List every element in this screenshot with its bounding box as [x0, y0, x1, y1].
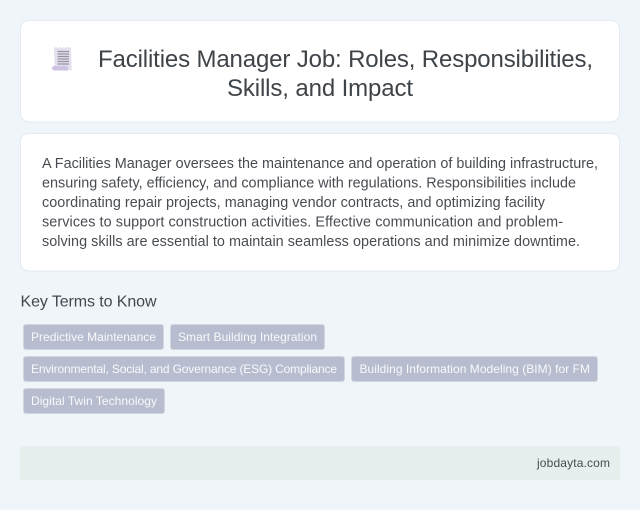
tag: smart building integration: Smart Building Integration — [178, 330, 317, 344]
tag: BIM for FM — [352, 356, 598, 382]
description text — [42, 156, 598, 250]
description text: services to support construction activities. Effective communication and problem- — [42, 214, 563, 230]
heading: key terms: Key Terms to Know — [20, 294, 157, 310]
title: Skills, and Impact — [227, 75, 413, 102]
tag: smart building integration — [170, 324, 324, 350]
tag: BIM for FM: Building Information Modeling (BIM) for FM — [360, 362, 590, 376]
footer bar — [20, 446, 620, 480]
icon: document scroll — [52, 47, 73, 70]
description text: ensuring safety, efficiency, and compliance with regulations. Responsibilities include — [42, 176, 576, 192]
panel: title card — [20, 20, 620, 122]
description text: coordinating repair projects, managing vendor contracts, and optimizing facility — [42, 195, 546, 211]
title: Facilities Manager Job: Roles, Responsibilities, — [98, 46, 593, 73]
tag: predictive maintenance — [24, 324, 164, 350]
description text: solving skills are essential to maintain seamless operations and minimize downtime. — [42, 234, 580, 250]
title — [98, 46, 593, 102]
description text: A Facilities Manager oversees the maintenance and operation of building infrastructure, — [42, 156, 598, 172]
panel: description card — [20, 134, 620, 271]
tag: ESG compliance: Environmental, Social, and Governance (ESG) Compliance — [31, 362, 337, 376]
tag: predictive maintenance: Predictive Maintenance — [31, 330, 156, 344]
tag: ESG compliance — [24, 356, 344, 382]
footer source text: jobdayta.com — [536, 456, 610, 470]
tag: digital twin technology — [24, 388, 164, 414]
tag: digital twin technology: Digital Twin Technology — [31, 394, 157, 408]
